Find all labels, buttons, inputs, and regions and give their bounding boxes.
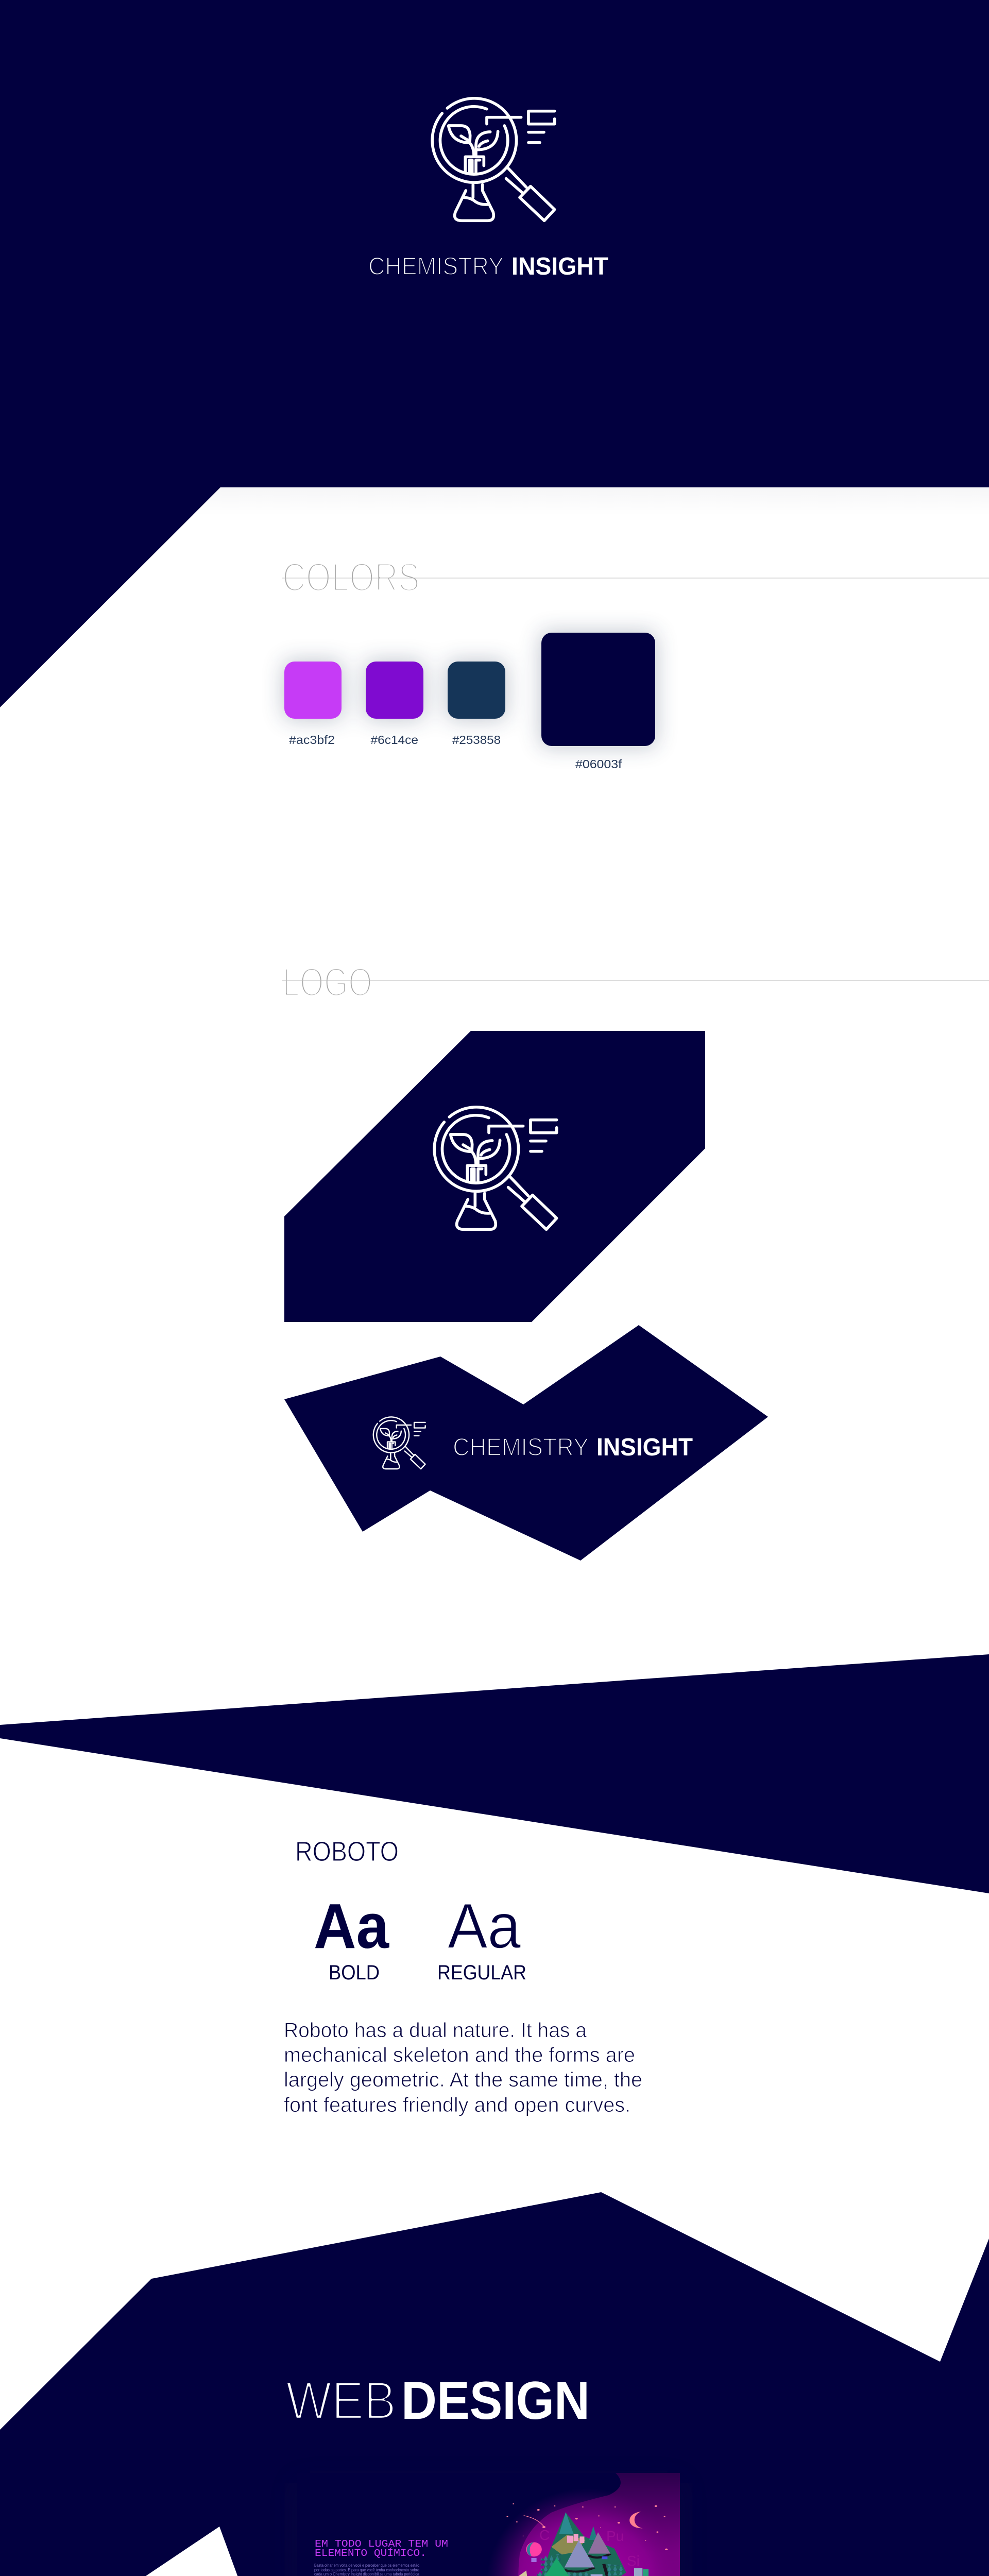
header logo wordmark xyxy=(368,253,608,280)
swatch 6c14ce xyxy=(366,662,423,719)
isometric city illustration xyxy=(506,2503,668,2576)
wordmark xyxy=(453,1434,693,1461)
swatch labels: #ac3bf2 xyxy=(289,733,335,747)
screenshot: landing page xyxy=(297,2473,688,2576)
regular sample: Aa xyxy=(448,1891,521,1962)
glow xyxy=(491,2493,653,2576)
screenshot shadows xyxy=(297,2483,684,2576)
wordmark: CHEMISTRY xyxy=(453,1434,589,1461)
header logo wordmark: INSIGHT xyxy=(511,253,608,280)
font name: ROBOTO xyxy=(295,1836,399,1867)
blob background xyxy=(518,2473,680,2576)
web design heading: DESIGN xyxy=(401,2371,590,2431)
description paragraph: mechanical skeleton and the forms are xyxy=(284,2044,635,2066)
logo card: horizontal lockup xyxy=(284,1325,768,1561)
swatch labels: #06003f xyxy=(575,757,622,771)
faint element symbols: C xyxy=(539,2527,550,2543)
description paragraph: largely geometric. At the same time, the xyxy=(284,2069,642,2091)
swatch labels: #6c14ce xyxy=(371,733,418,747)
web design heading: WEB xyxy=(286,2371,396,2431)
logo card: icon only xyxy=(284,1031,705,1322)
shooting star xyxy=(523,2515,544,2527)
hero paragraph: Basta olhar em volta de você e perceber que os elementos estão xyxy=(314,2563,419,2568)
balloon xyxy=(526,2542,542,2562)
colors section heading: COLORS xyxy=(282,554,420,600)
description paragraph: font features friendly and open curves. xyxy=(284,2094,630,2116)
wordmark: INSIGHT xyxy=(596,1434,693,1461)
faint element symbols xyxy=(540,2530,639,2566)
top shading under header xyxy=(193,487,989,515)
swatch ac3bf2 xyxy=(284,662,342,719)
regular caption: REGULAR xyxy=(437,1961,526,1984)
stars xyxy=(506,2503,668,2550)
swatch labels: #253858 xyxy=(452,733,501,747)
description paragraph xyxy=(284,2019,642,2116)
description paragraph: Roboto has a dual nature. It has a xyxy=(284,2019,587,2042)
faint element symbols: Pu xyxy=(606,2528,624,2544)
logo section heading: LOGO xyxy=(282,959,372,1005)
bold caption: BOLD xyxy=(329,1961,380,1984)
header navy panel xyxy=(0,0,989,707)
icon xyxy=(434,1107,557,1229)
peaks xyxy=(559,2512,574,2534)
plateau xyxy=(551,2535,586,2554)
small icon xyxy=(373,1417,425,1469)
hero headline: EM TODO LUGAR TEM UM xyxy=(315,2538,448,2550)
web design navy shape xyxy=(0,2192,989,2576)
swatch 253858 xyxy=(448,662,505,719)
roads xyxy=(565,2553,611,2576)
colors palette xyxy=(284,633,655,771)
hero paragraph xyxy=(314,2563,419,2576)
bold sample: Aa xyxy=(314,1891,389,1962)
hero headline: ELEMENTO QUÍMICO. xyxy=(315,2548,427,2559)
swatch shadow group xyxy=(284,633,655,746)
mountain base xyxy=(538,2513,626,2576)
hero headline xyxy=(315,2540,448,2558)
faint element symbols: Si xyxy=(627,2553,640,2569)
swatch labels xyxy=(289,733,622,771)
typography section xyxy=(284,1836,642,2116)
cones xyxy=(545,2558,569,2576)
forest xyxy=(537,2572,591,2576)
web design heading xyxy=(286,2371,590,2431)
header logo wordmark: CHEMISTRY xyxy=(368,253,504,280)
buildings xyxy=(519,2568,649,2576)
hero paragraph: por todas as partes. E para que você tenha conhecimento sobre xyxy=(314,2567,419,2572)
hill houses xyxy=(567,2534,584,2543)
header logo icon xyxy=(432,98,555,221)
moon xyxy=(629,2512,643,2528)
swatch 06003f xyxy=(541,633,655,746)
typography divider band xyxy=(0,1654,989,1893)
